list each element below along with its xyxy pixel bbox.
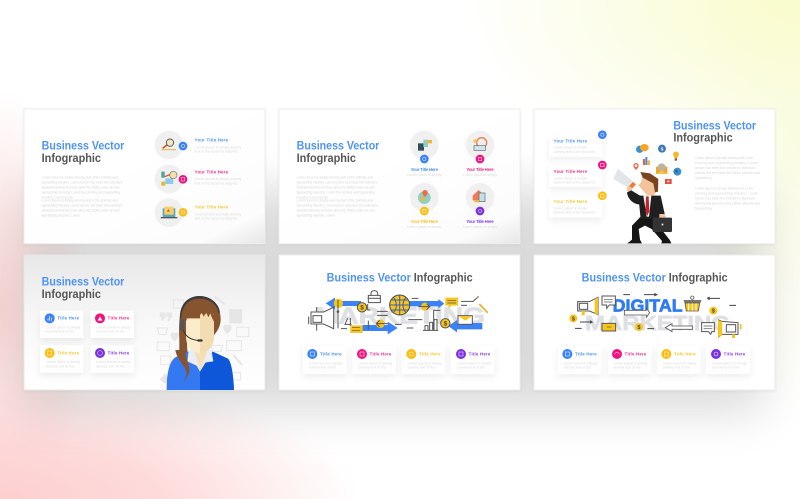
- card: pink: Lorem Ipsum is simply: [96, 325, 131, 329]
- card: purple: dummy text of the: [712, 366, 740, 370]
- card: blue: Title Here: [57, 316, 80, 321]
- heading: slide 1: Business Vector: [42, 140, 125, 153]
- card: yellow: Lorem Ipsum is simply: [554, 206, 587, 210]
- card: blue: dummy text of the: [46, 330, 74, 334]
- text block: slide 2 body: standard dummy text ever since the 1500s, when an and: [297, 209, 374, 213]
- card: blue: Lorem Ipsum is simply: [554, 146, 587, 150]
- card: purple: [451, 346, 494, 374]
- card: yellow: Title Here: [57, 350, 80, 355]
- panel: slide 3, megaphone businessman: [534, 109, 775, 244]
- card: yellow: Your Title Here: [554, 199, 588, 204]
- card: pink: [352, 346, 396, 374]
- card: yellow: dummy text of the: [408, 366, 435, 370]
- panel: slide 5, marketing line art: [279, 255, 520, 390]
- item: blue magnifier: Lorem Ipsum is simply dummy: [195, 145, 242, 149]
- text block: slide 1 body: Lorem Ipsum is simply dummy text of the printing and: [42, 175, 118, 179]
- card: blue: [549, 130, 607, 157]
- item: yellow laptop: Your Title Here: [195, 204, 229, 209]
- text block: slide 3 body: dummy text ever since the 1500s, when an and: [695, 202, 760, 206]
- card: purple: Lorem Ipsum is simply: [457, 361, 492, 365]
- word art: MARKETING: MARKETING: [585, 312, 730, 335]
- item: blue magnifier: text of the Ipsum is dapphic: [195, 150, 238, 154]
- card: pink: [91, 311, 134, 338]
- item: purple house tablet: Your Title Here: [466, 219, 494, 224]
- card: yellow: Title Here: [419, 351, 441, 356]
- item: blue documents: [407, 131, 442, 177]
- card: pink: dummy text of the: [613, 366, 641, 370]
- card: blue: Title Here: [320, 351, 342, 356]
- arrows: blue flow: [326, 298, 482, 334]
- text block: slide 3 body: Lorem Ipsum is simply dummy text of the: [695, 186, 753, 190]
- card: pink: dummy text of the Ipsum is: [554, 181, 595, 185]
- text block: slide 3 body: dummy text ever since the 1500s, when an and: [695, 171, 760, 175]
- card: pink: [549, 161, 607, 187]
- heading: slide 3: Business Vector: [673, 119, 756, 132]
- item: purple house tablet: Lorem Ipsum is simply: [463, 225, 497, 229]
- panel: slide 2, four item grid: [279, 109, 520, 244]
- icons: faded support symbols: [157, 297, 249, 384]
- item: pink gear laptop: Lorem Ipsum is simply: [463, 173, 497, 177]
- illustration: woman with headset: [167, 296, 234, 390]
- diagram: megaphones, coins, arrows and basket: $: [638, 325, 641, 331]
- heading: slide 3: Infographic: [673, 132, 733, 145]
- item: yellow laptop: Lorem Ipsum is simply dummy: [195, 212, 242, 216]
- text block: slide 1 body: typesetting industry. Lorem Ipsum has been the industry's: [42, 204, 123, 208]
- item: blue documents: Lorem Ipsum is simply: [407, 173, 442, 177]
- word art: MARKETING: MARKETING: [315, 302, 485, 328]
- text block: slide 3 body: printing and typesetting industry. Lorem: [695, 161, 759, 165]
- card: pink: dummy text of the: [96, 330, 125, 334]
- text block: slide 3 body: Ipsum has been the industry's standard: [695, 166, 755, 170]
- card: purple: dummy text of the: [96, 364, 125, 368]
- card: pink: Title Here: [108, 316, 130, 321]
- text block: slide 2 body: Lorem Ipsum is simply dummy text of the printing and: [297, 199, 373, 203]
- item: pink gear laptop: Your Title Here: [466, 167, 494, 172]
- text block: slide 3 body: printing and typesetting industry. Lorem: [695, 191, 759, 195]
- diagram: megaphones, coins, arrows and basket: [569, 293, 741, 338]
- text block: slide 2 body: Lorem Ipsum is simply dummy text of the printing and: [297, 175, 373, 179]
- card: yellow: [402, 346, 445, 374]
- text block: slide 2 body: typesetting industry. Lorem Ipsum has been the industry's: [297, 180, 378, 184]
- item: yellow globe pin: Lorem Ipsum is simply: [407, 225, 442, 229]
- text block: slide 3 body: [695, 156, 760, 211]
- item: pink hourglass: Lorem Ipsum is simply dummy: [195, 177, 242, 181]
- text block: slide 1 body: typesetting industry. Lorem Ipsum has been the industry's: [42, 180, 123, 184]
- card: pink: Title Here: [370, 351, 392, 356]
- text block: slide 1 body: typesetting industry. Lorem the printing and typesetting: [42, 190, 120, 194]
- heading: slide 1: Infographic: [42, 152, 101, 165]
- item: pink hourglass: Your Title Here: [195, 169, 229, 174]
- text block: slide 2 body: typesetting industry. Lorem: [297, 214, 335, 218]
- card: yellow: dummy text of the: [46, 364, 74, 368]
- icons: floating marketing symbols: $: [661, 146, 664, 151]
- heading: slide 5: Business Vector Infographic: [327, 272, 473, 285]
- text block: slide 2 body: standard dummy text ever since the 1500s, when an and: [297, 185, 374, 189]
- card: purple: Lorem Ipsum is simply: [712, 361, 747, 365]
- item: yellow laptop: text of the Ipsum is dapphic: [195, 217, 238, 221]
- card: pink: Lorem Ipsum is simply: [358, 361, 393, 365]
- card: blue: dummy text of the Ipsum is: [554, 150, 595, 154]
- heading: slide 2: [297, 140, 380, 165]
- card: yellow: Title Here: [674, 351, 696, 356]
- item: pink hourglass: text of the Ipsum is dapphic: [195, 181, 238, 185]
- card: blue: Your Title Here: [554, 138, 588, 143]
- word art: DIGITAL: DIGITAL: [613, 295, 683, 315]
- text block: slide 3 body: Lorem Ipsum is simply dummy text of the: [695, 156, 753, 160]
- text block: slide 2 body: industry. Lorem Ipsum: [297, 195, 329, 199]
- card: blue: dummy text of the: [564, 366, 591, 370]
- card: blue: Lorem Ipsum is simply: [564, 361, 598, 365]
- card: yellow: Lorem Ipsum is simply: [408, 361, 442, 365]
- card: purple: Title Here: [469, 351, 491, 356]
- illustration: businessman with megaphone and briefcase: [613, 169, 672, 243]
- text block: slide 1 body: industry. Lorem Ipsum: [42, 195, 74, 199]
- card: purple: [706, 346, 750, 374]
- card: blue: [558, 346, 601, 374]
- panel: slide 6, digital marketing line art: [534, 255, 775, 390]
- text block: slide 1 body: standard dummy text ever since the 1500s, when an and: [42, 209, 119, 213]
- card: yellow: Lorem Ipsum is simply: [46, 360, 81, 364]
- item: yellow globe pin: [407, 183, 442, 229]
- card: purple: Lorem Ipsum is simply: [96, 360, 131, 364]
- diagram: megaphones, coins, arrows and basket: $: [572, 316, 575, 322]
- diagram: megaphones, coins, arrows and basket: $: [712, 309, 715, 315]
- card: blue: [40, 311, 83, 338]
- card: purple: Title Here: [108, 350, 130, 355]
- item: blue magnifier: Your Title Here: [195, 137, 229, 142]
- background: soft grey shadow behind slides: [25, 190, 765, 412]
- text block: slide 2 body: typesetting industry. Lorem the printing and typesetting: [297, 190, 375, 194]
- card: yellow: [657, 346, 700, 374]
- diagram: marketing line icons: $: [444, 321, 448, 328]
- card: blue: Lorem Ipsum is simply: [309, 361, 343, 365]
- card: yellow: Lorem Ipsum is simply: [663, 361, 697, 365]
- card: pink: [608, 346, 651, 374]
- item: pink gear laptop: [463, 131, 497, 177]
- card: yellow: dummy text of the: [663, 366, 690, 370]
- text block: slide 1 body: [42, 175, 123, 218]
- card: blue: Lorem Ipsum is simply: [46, 325, 81, 329]
- item: yellow globe pin: Your Title Here: [411, 219, 439, 224]
- card: pink: dummy text of the: [358, 366, 386, 370]
- text block: slide 2 body: [297, 175, 378, 218]
- heading: slide 2: Infographic: [297, 152, 356, 165]
- heading: slide 4: [42, 276, 125, 301]
- item: pink hourglass: [155, 165, 242, 193]
- icons: floating marketing symbols: [633, 144, 681, 184]
- card: pink: Title Here: [625, 351, 647, 356]
- card: pink: Lorem Ipsum is simply: [613, 361, 648, 365]
- item: yellow laptop: [155, 198, 242, 227]
- item: blue magnifier: [155, 131, 242, 159]
- text block: slide 1 body: typesetting industry. Lorem: [42, 214, 80, 218]
- heading: slide 4: Infographic: [42, 288, 101, 301]
- heading: slide 2: Business Vector: [297, 140, 380, 153]
- text block: slide 3 body: Ipsum has been the industry's standard: [695, 197, 755, 201]
- diagram: marketing line icons: $: [360, 305, 364, 312]
- card: yellow: [549, 191, 607, 217]
- item: purple house tablet: [463, 183, 497, 229]
- heading: slide 1: [42, 140, 125, 165]
- text block: slide 1 body: standard dummy text ever since the 1500s, when an and: [42, 185, 119, 189]
- card: pink: Your Title Here: [554, 169, 588, 174]
- card: blue: Title Here: [575, 351, 597, 356]
- text block: slide 3 body: typesetting: [695, 176, 712, 180]
- heading: slide 3: [673, 119, 756, 145]
- card: blue: [303, 346, 346, 374]
- card: purple: [91, 345, 134, 373]
- card: purple: dummy text of the: [457, 366, 485, 370]
- card: blue: dummy text of the: [309, 366, 336, 370]
- text block: slide 2 body: typesetting industry. Lorem Ipsum has been the industry's: [297, 204, 378, 208]
- card: pink: Lorem Ipsum is simply: [554, 176, 587, 180]
- card: yellow: dummy text of the Ipsum is: [554, 211, 595, 215]
- text block: slide 1 body: Lorem Ipsum is simply dummy text of the printing and: [42, 199, 118, 203]
- heading: slide 4: Business Vector: [42, 276, 125, 289]
- item: blue documents: Your Title Here: [411, 167, 439, 172]
- text block: slide 3 body: typesetting: [695, 207, 712, 211]
- heading: slide 6: Business Vector Infographic: [582, 272, 728, 285]
- card: yellow: [40, 345, 83, 373]
- panel: slide 4, headset support agent: [24, 255, 265, 390]
- diagram: marketing line icons: [309, 291, 488, 333]
- card: purple: Title Here: [724, 351, 746, 356]
- panel: slide 1, three item list: [24, 109, 265, 244]
